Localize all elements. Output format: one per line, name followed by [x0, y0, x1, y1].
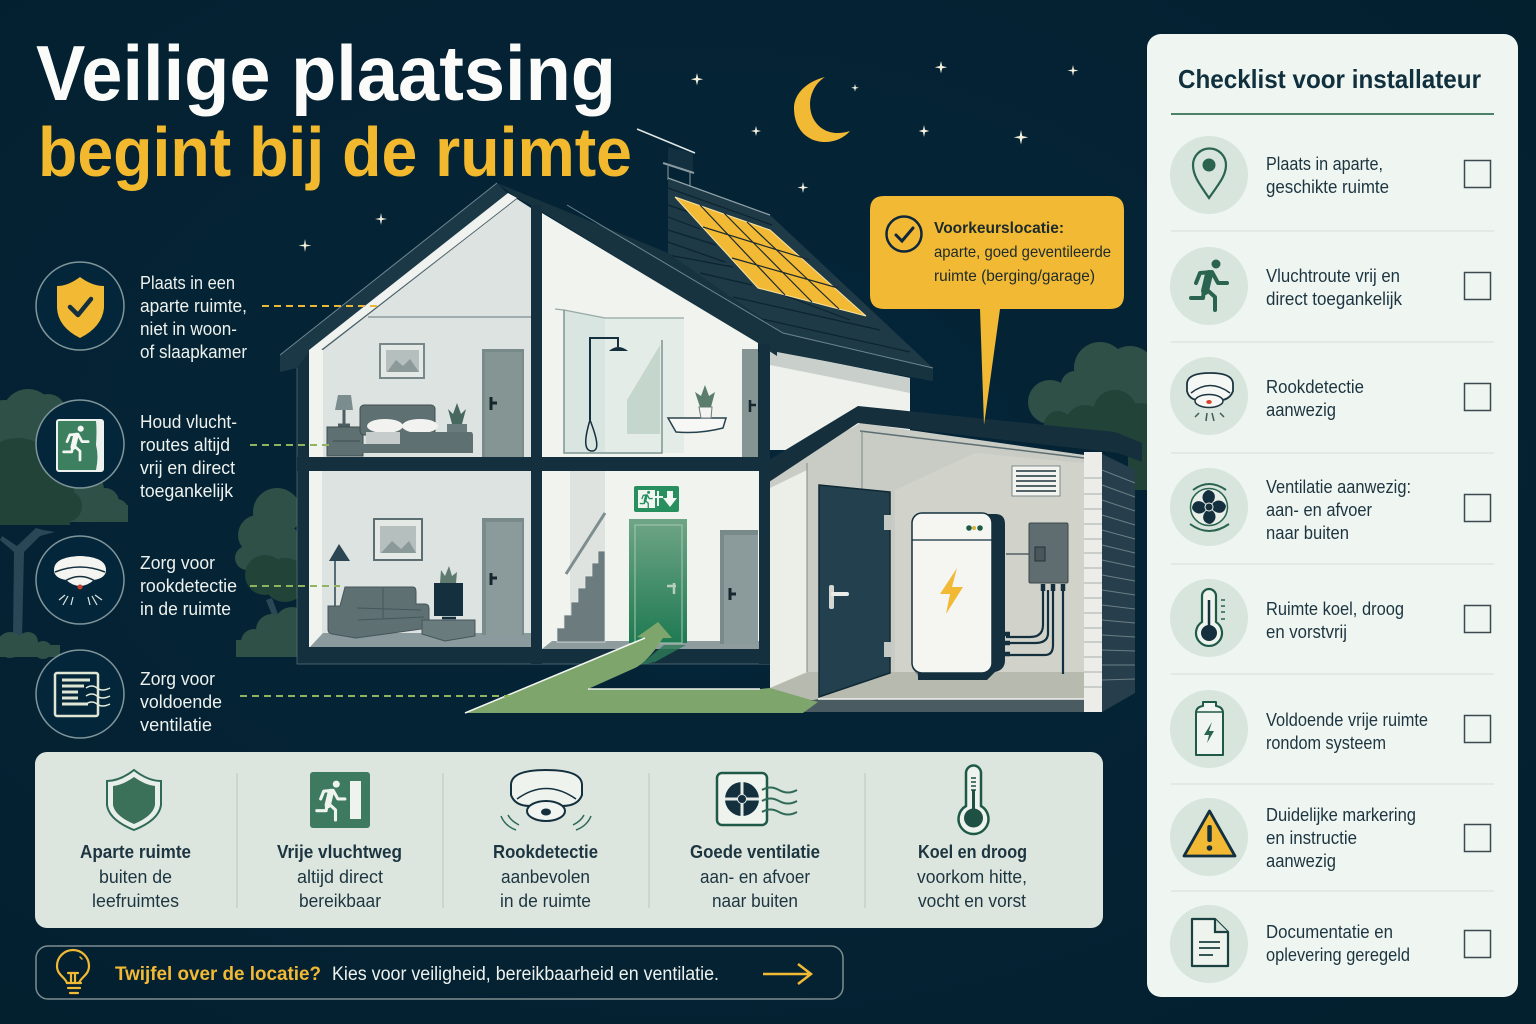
chimney and antenna — [637, 129, 695, 186]
checklist row 8: oplevering geregeld — [1266, 945, 1410, 965]
background trees — [0, 342, 1162, 659]
summary: cool and dry: vocht en vorst — [918, 891, 1026, 911]
summary: separate room: buiten de — [99, 867, 172, 887]
summary: separate room: leefruimtes — [92, 891, 179, 911]
inverter box and cables — [1001, 523, 1068, 674]
title: begint bij de ruimte — [38, 113, 632, 191]
icon: ventilation — [36, 650, 124, 738]
summary: free escape route: bereikbaar — [299, 891, 381, 911]
stairs — [557, 551, 605, 642]
left callout 3: smoke detection: in de ruimte — [140, 599, 231, 619]
summary: cool and dry: voorkom hitte, — [917, 867, 1027, 887]
icon: exit sign — [36, 400, 124, 488]
garage room — [769, 406, 1142, 712]
icon: shield — [36, 262, 124, 350]
summary: ventilation: naar buiten — [712, 891, 798, 911]
callout: preferred location: Voorkeurslocatie: — [934, 220, 1064, 237]
summary: separate room: Aparte ruimte — [80, 842, 191, 862]
checklist row 2: Vluchtroute vrij en — [1266, 266, 1400, 286]
checklist row 3: aanwezig — [1266, 400, 1336, 420]
lower right room: stairs and exit — [542, 471, 759, 649]
icon: light bulb — [57, 950, 89, 993]
emergency exit sign — [634, 486, 679, 512]
left callout 2: escape routes: toegankelijk — [140, 481, 234, 501]
summary: ventilation — [690, 773, 820, 911]
checklist row 4: naar buiten — [1266, 523, 1349, 543]
checklist row 8 — [1170, 905, 1490, 983]
summary: smoke detection: Rookdetectie — [493, 842, 598, 862]
upper right room: bathroom — [542, 213, 758, 457]
summary: cool and dry: Koel en droog — [918, 842, 1027, 862]
checklist row 4: Ventilatie aanwezig: — [1266, 477, 1411, 497]
checklist row 7: en instructie — [1266, 828, 1357, 848]
callout: preferred location: ruimte (berging/garage) — [934, 268, 1095, 285]
bottom tip bar: Kies voor veiligheid, bereikbaarheid en ventilatie. — [332, 964, 719, 985]
main house dark frame — [297, 352, 770, 664]
garage back interior wall — [770, 423, 1084, 700]
solar panel — [675, 197, 866, 316]
bottom tip bar — [36, 946, 843, 999]
brick wall corner — [1084, 452, 1135, 712]
left callout 1: separate room: aparte ruimte, — [140, 296, 247, 316]
checklist row 4: aan- en afvoer — [1266, 500, 1372, 520]
icon: smoke detector — [36, 536, 124, 624]
checklist row 1 — [1170, 136, 1490, 214]
left callout 1: separate room: of slaapkamer — [140, 342, 247, 362]
summary: free escape route — [277, 772, 402, 911]
left callout 2: escape routes — [36, 400, 330, 501]
checklist row 6: rondom systeem — [1266, 733, 1386, 753]
shingled roof — [668, 178, 933, 381]
green exit door — [629, 519, 687, 643]
checklist row 8: Documentatie en — [1266, 922, 1393, 942]
bottom tip bar: Twijfel over de locatie? — [115, 964, 321, 985]
left callout 4: ventilation: voldoende — [140, 692, 222, 712]
left callout 3: smoke detection: rookdetectie — [140, 576, 237, 596]
left callout 4: ventilation — [36, 650, 510, 738]
garage roof — [769, 406, 1142, 482]
left callout 4: ventilation: Zorg voor — [140, 669, 215, 689]
summary: smoke detection: in de ruimte — [500, 891, 591, 911]
left callout 2: escape routes: Houd vlucht- — [140, 412, 237, 432]
gable left roof band — [280, 183, 517, 372]
side wall — [770, 350, 910, 450]
left callout 2: escape routes: routes altijd — [140, 435, 230, 455]
summary: smoke detection — [493, 770, 598, 911]
checklist row 1: Plaats in aparte, — [1266, 154, 1383, 174]
night sky: stars and moon — [298, 61, 1078, 252]
summary: ventilation: Goede ventilatie — [690, 842, 820, 862]
upper left room: bedroom — [309, 199, 531, 457]
open door — [819, 485, 892, 697]
summary: free escape route: altijd direct — [297, 867, 383, 887]
house — [280, 129, 1142, 713]
checklist row 6: Voldoende vrije ruimte — [1266, 710, 1428, 730]
callout: preferred location: aparte, goed geventileerde — [934, 244, 1111, 261]
summary: separate room — [80, 770, 191, 911]
checklist row 6 — [1170, 690, 1490, 768]
green escape route arrow — [465, 622, 818, 713]
title: Veilige plaatsing — [36, 29, 616, 117]
lower left room: living room — [309, 471, 531, 647]
left callout 3: smoke detection: Zorg voor — [140, 553, 215, 573]
checklist row 7: Duidelijke markering — [1266, 805, 1416, 825]
checklist row 4 — [1170, 468, 1490, 546]
white gable band — [309, 193, 517, 350]
arrow — [763, 964, 811, 984]
checklist row 5: Ruimte koel, droog — [1266, 599, 1404, 619]
left callout 1: separate room: niet in woon- — [140, 319, 237, 339]
left callout 3: smoke detection — [36, 536, 340, 624]
summary: free escape route: Vrije vluchtweg — [277, 842, 402, 862]
checklist row 5 — [1170, 579, 1490, 657]
checklist row 2 — [1170, 247, 1490, 325]
left callout 1: separate room: Plaats in een — [140, 273, 235, 293]
panel: installer checklist — [1147, 34, 1518, 997]
checklist row 7: aanwezig — [1266, 851, 1336, 871]
left callout 4: ventilation: ventilatie — [140, 715, 212, 735]
checklist row 7 — [1170, 798, 1490, 876]
ventilation grille — [1012, 466, 1060, 496]
checklist row 5: en vorstvrij — [1266, 622, 1347, 642]
panel: summary strip — [35, 752, 1103, 928]
central column and floor — [297, 205, 770, 664]
checklist row 3 — [1170, 357, 1490, 435]
summary: smoke detection: aanbevolen — [501, 867, 590, 887]
left callout 2: escape routes: vrij en direct — [140, 458, 235, 478]
left callout 1: separate room — [36, 262, 378, 362]
callout: preferred location — [870, 196, 1124, 425]
summary: ventilation: aan- en afvoer — [700, 867, 810, 887]
home battery — [912, 513, 1005, 680]
right roof band — [497, 183, 933, 381]
checklist row 2: direct toegankelijk — [1266, 289, 1403, 309]
title — [36, 29, 632, 191]
panel: installer checklist: Checklist voor installateur — [1178, 64, 1481, 94]
checklist row 3: Rookdetectie — [1266, 377, 1364, 397]
summary: cool and dry — [917, 766, 1027, 911]
checklist row 1: geschikte ruimte — [1266, 177, 1389, 197]
